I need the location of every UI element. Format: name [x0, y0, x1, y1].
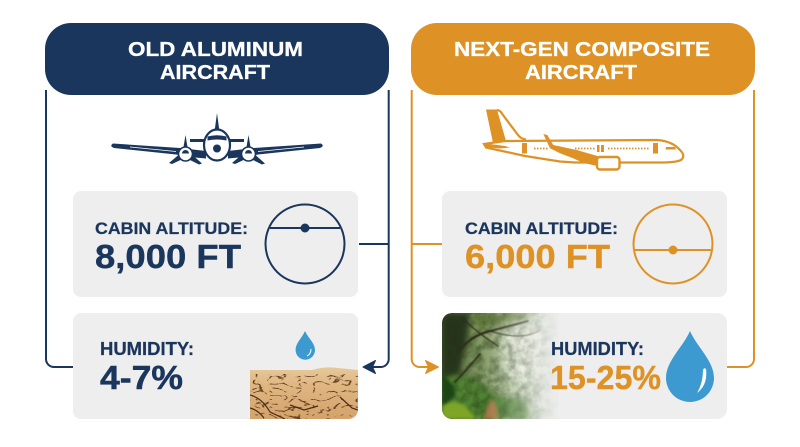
icon: propeller airplane [111, 113, 323, 164]
heading: old aluminum aircraft: OLD ALUMINUM [128, 39, 303, 61]
card: humidity 4-7%: 4-7% [100, 359, 183, 396]
heading: old aluminum aircraft [45, 23, 389, 95]
card: cabin altitude 8,000 ft [73, 191, 358, 297]
icon: altitude gauge [266, 204, 344, 284]
icon: altitude gauge [634, 204, 712, 284]
heading: old aluminum aircraft: AIRCRAFT [160, 62, 270, 84]
card: humidity 15-25%: 15-25% [550, 359, 661, 396]
card: cabin altitude 6,000 ft: CABIN ALTITUDE: [465, 219, 618, 238]
heading: next-gen composite aircraft: NEXT-GEN COMPOSITE [454, 39, 710, 61]
card: cabin altitude 8,000 ft: 8,000 FT [95, 238, 241, 275]
heading: next-gen composite aircraft [411, 23, 755, 95]
card: humidity 15-25%: HUMIDITY: [551, 339, 644, 359]
image: misty rainforest [442, 313, 567, 419]
icon: modern jet airliner [482, 110, 683, 170]
card: cabin altitude 8,000 ft: CABIN ALTITUDE: [95, 219, 248, 238]
card: humidity 15-25% [442, 313, 727, 419]
card: humidity 4-7% [73, 313, 358, 420]
card: humidity 4-7%: HUMIDITY: [100, 339, 194, 359]
heading: next-gen composite aircraft: AIRCRAFT [525, 62, 637, 84]
image: cracked dry earth [250, 367, 358, 420]
icon: large water drop [666, 331, 714, 402]
connector: next-gen aircraft outline with arrow [412, 90, 754, 374]
panel: next-gen composite aircraft [411, 23, 755, 419]
card: cabin altitude 6,000 ft [442, 191, 727, 297]
icon: small water drop [296, 331, 315, 360]
panel: old aluminum aircraft [45, 23, 389, 420]
connector: old aircraft outline with arrow [46, 90, 389, 374]
card: cabin altitude 6,000 ft: 6,000 FT [465, 238, 610, 275]
